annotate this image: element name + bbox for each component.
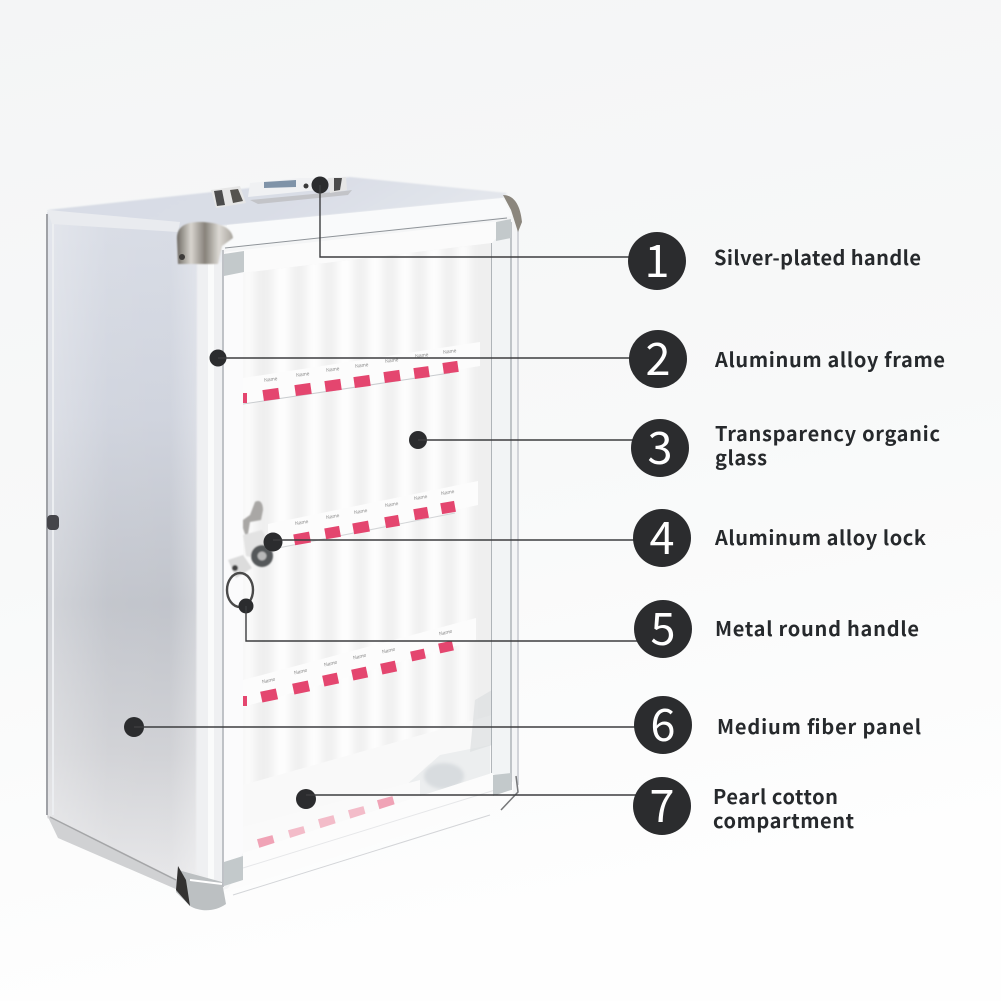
case side panel <box>47 210 223 888</box>
metal round ring handle <box>227 573 253 607</box>
callout 5: metal round handle <box>238 593 919 658</box>
callout 3: transparency organic glass: 3 <box>648 412 672 477</box>
bottom rail <box>47 815 178 890</box>
callout 7: pearl cotton compartment <box>296 770 855 835</box>
callout 3: transparency organic glass <box>409 412 940 477</box>
door lock <box>228 501 273 578</box>
name strip row 1: Name <box>415 352 429 360</box>
callout 5: metal round handle: 5 <box>651 593 675 658</box>
callout 1: silver-plated handle <box>312 176 921 290</box>
name strip row 2: Name <box>354 508 368 516</box>
callout 1: silver-plated handle: 1 <box>645 225 669 290</box>
name strip row 2: Name <box>295 519 309 527</box>
name strip row 3: Name <box>353 653 367 661</box>
right door stile <box>492 215 518 790</box>
bottom corner bracket <box>176 866 226 910</box>
callout 7: pearl cotton compartment: 7 <box>650 770 674 835</box>
bottom door rail <box>225 773 513 892</box>
left door stile <box>224 252 243 887</box>
aluminium case illustration <box>47 177 522 910</box>
name strip row 3: Name <box>324 660 338 668</box>
door frame <box>223 215 519 890</box>
name strip row 2: Name <box>441 489 455 497</box>
callout 6: medium fiber panel: Medium fiber panel <box>717 711 921 740</box>
name strip row 1: Name <box>355 362 369 370</box>
callout 3: transparency organic glass: Transparency organic <box>715 418 940 447</box>
name strip row 1: Name <box>385 357 399 365</box>
name strip row 3: Name <box>262 677 276 685</box>
name strip row 3 <box>243 618 476 707</box>
glass panel and pearl cotton compartment <box>223 240 492 887</box>
callout 4: aluminum alloy lock: 4 <box>650 502 674 567</box>
name strip row 1: Name <box>296 371 310 379</box>
bottom right latch <box>501 776 518 810</box>
callout 7: pearl cotton compartment: Pearl cotton <box>713 781 838 810</box>
name strip row 1: Name <box>326 366 340 374</box>
callout 5: metal round handle: Metal round handle <box>715 613 919 642</box>
corner pads <box>224 219 511 886</box>
callout 3: transparency organic glass: glass <box>715 442 767 471</box>
foam stripes <box>244 246 468 784</box>
name strip row 2: Name <box>385 501 399 509</box>
name strip row 1 <box>243 342 480 404</box>
callout 2: aluminum alloy frame: Aluminum alloy frame <box>714 344 945 373</box>
case top face <box>47 177 507 230</box>
callout 2: aluminum alloy frame: 2 <box>646 323 670 388</box>
name strip row 2: Name <box>326 513 340 521</box>
right corner latch <box>503 195 522 232</box>
side clasp <box>47 515 59 530</box>
front top rail <box>225 198 512 248</box>
callout 4: aluminum alloy lock <box>264 502 926 567</box>
callout 6: medium fiber panel <box>124 689 921 754</box>
name strip row 4 <box>243 780 420 853</box>
carry handle <box>211 177 352 208</box>
name strip row 2 <box>268 481 478 550</box>
callout 2: aluminum alloy frame <box>210 323 945 388</box>
name strip row 2: Name <box>414 494 428 502</box>
top corner bracket <box>177 222 233 264</box>
name strip row 1: Name <box>264 376 278 384</box>
callout 4: aluminum alloy lock: Aluminum alloy lock <box>714 522 926 551</box>
name strip row 3: Name <box>439 629 453 637</box>
callout 7: pearl cotton compartment: compartment <box>713 805 855 834</box>
name strip row 3: Name <box>294 668 308 676</box>
name strip row 3: Name <box>382 647 396 655</box>
top door rail <box>225 220 512 273</box>
callout 1: silver-plated handle: Silver-plated handle <box>714 242 921 271</box>
name strip row 1: Name <box>443 348 457 356</box>
callout 6: medium fiber panel: 6 <box>651 689 675 754</box>
